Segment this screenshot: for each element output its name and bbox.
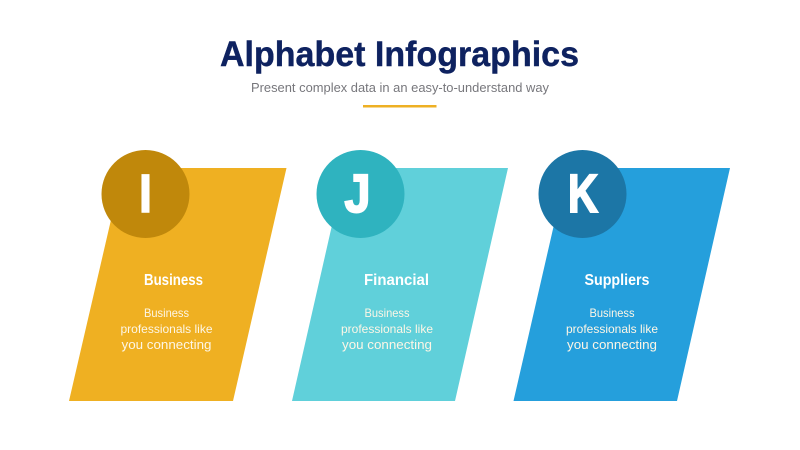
body text: you connecting (342, 337, 432, 352)
letter badge I (102, 150, 190, 238)
letter badge I: I (139, 164, 152, 224)
accent underline (363, 105, 436, 108)
body text: Business (590, 306, 634, 320)
card shape (292, 168, 508, 401)
heading: Business (144, 272, 203, 289)
heading: Financial (364, 272, 429, 289)
panel: I Business (69, 150, 286, 401)
letter badge K (538, 150, 626, 238)
letter badge J (316, 150, 404, 238)
body text (566, 306, 658, 352)
body text: professionals like (120, 322, 213, 336)
body text: you connecting (567, 337, 657, 352)
body text: Business (144, 306, 189, 320)
title: Alphabet Infographics (220, 35, 579, 74)
card shape (69, 168, 286, 401)
body text (341, 306, 433, 352)
card shape (514, 168, 730, 401)
heading: Suppliers (584, 272, 650, 289)
body text: professionals like (341, 322, 433, 336)
body text: you connecting (122, 337, 212, 352)
panel: J Financial (292, 150, 508, 401)
letter badge J: J (344, 164, 370, 224)
body text (120, 306, 213, 352)
subtitle: Present complex data in an easy-to-understand way (251, 80, 549, 95)
body text: Business (364, 306, 410, 320)
body text: professionals like (566, 322, 658, 336)
letter badge K: K (568, 164, 598, 224)
panel: K Suppliers (514, 150, 730, 401)
